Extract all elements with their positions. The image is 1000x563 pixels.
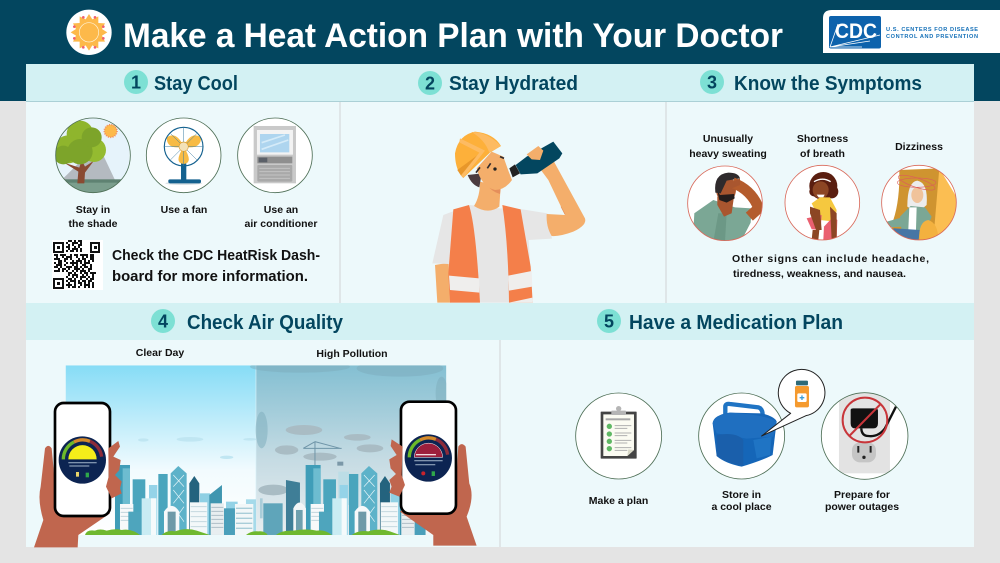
gauge: hazardous air quality xyxy=(405,434,452,482)
logo: CDC: CDC xyxy=(835,20,877,43)
heading: 1 Stay Cool xyxy=(124,70,238,95)
header band xyxy=(0,0,1000,101)
heading: 2 Stay Hydrated: Stay Hydrated xyxy=(449,73,578,95)
icon: tree in the shade xyxy=(54,118,130,193)
label: store in a cool place: a cool place xyxy=(711,501,772,513)
heading: 3 Know the Symptoms: 3 xyxy=(707,72,717,92)
QR code xyxy=(52,240,103,290)
title: Make a Heat Action Plan with Your Doctor xyxy=(123,17,783,55)
heading: 4 Check Air Quality: 4 xyxy=(158,312,168,332)
text: CDC HeatRisk callout xyxy=(112,248,320,285)
icon: air conditioner xyxy=(238,118,312,193)
logo: CDC: U.S. CENTERS FOR DISEASE xyxy=(886,27,978,33)
heading: 2 Stay Hydrated: 2 xyxy=(425,74,435,94)
label: store in a cool place: Store in xyxy=(722,489,761,501)
icon: sun xyxy=(66,10,112,55)
icon: clipboard plan xyxy=(576,393,662,479)
illustration: city clear and polluted xyxy=(66,360,448,535)
label: high pollution: High Pollution xyxy=(316,348,388,360)
label: stay in the shade: Stay in xyxy=(76,204,110,216)
heading: 4 Check Air Quality: Check Air Quality xyxy=(187,312,344,334)
heading: 4 Check Air Quality xyxy=(151,309,344,334)
label: shortness of breath: Shortness xyxy=(797,133,848,145)
heading: 1 Stay Cool: Stay Cool xyxy=(154,73,238,95)
label: stay in the shade: the shade xyxy=(68,218,118,230)
heading: 3 Know the Symptoms: Know the Symptoms xyxy=(734,73,922,95)
heading: 5 Have a Medication Plan: Have a Medication Plan xyxy=(629,312,843,334)
label: clear day: Clear Day xyxy=(136,347,184,359)
panel: upper row xyxy=(26,64,974,303)
heading: 1 Stay Cool: 1 xyxy=(131,72,141,92)
label: use an air conditioner: air conditioner xyxy=(245,218,317,230)
text: other signs: Other signs can include headache, xyxy=(732,253,929,265)
label: unusually heavy sweating: Unusually xyxy=(703,133,753,145)
label: prepare for power outages: power outages xyxy=(825,501,899,513)
speech bubble xyxy=(762,369,825,436)
illustration: worker drinking water xyxy=(432,132,585,303)
panel: lower row xyxy=(26,303,974,547)
label: shortness of breath: of breath xyxy=(800,148,845,160)
label: dizziness: Dizziness xyxy=(895,141,943,153)
icon: cooler bag with medicine bubble xyxy=(699,369,825,479)
label: use an air conditioner: Use an xyxy=(264,204,298,216)
label: unusually heavy sweating: heavy sweating xyxy=(689,148,767,160)
text: other signs: tiredness, weakness, and nausea. xyxy=(733,268,906,280)
heading: 5 Have a Medication Plan: 5 xyxy=(604,312,614,332)
logo: CDC xyxy=(823,10,1000,53)
icon: outlet with no-plug symbol xyxy=(821,393,908,479)
label: make a plan: Make a plan xyxy=(589,495,648,507)
icon: fan xyxy=(146,118,221,193)
icon: dizzy woman xyxy=(882,165,958,242)
label: use a fan: Use a fan xyxy=(161,204,207,216)
icon: woman short of breath xyxy=(785,165,860,240)
text: CDC HeatRisk callout: board for more information. xyxy=(112,269,308,285)
illustration: left hand with phone xyxy=(34,403,122,547)
illustration: right hand with phone xyxy=(389,402,477,546)
label: prepare for power outages: Prepare for xyxy=(834,489,890,501)
text: CDC HeatRisk callout: Check the CDC HeatRisk Dash- xyxy=(112,248,320,264)
gauge: moderate air quality xyxy=(59,436,106,484)
logo: CDC: CONTROL AND PREVENTION xyxy=(886,34,978,40)
icon: man sweating xyxy=(688,166,762,243)
